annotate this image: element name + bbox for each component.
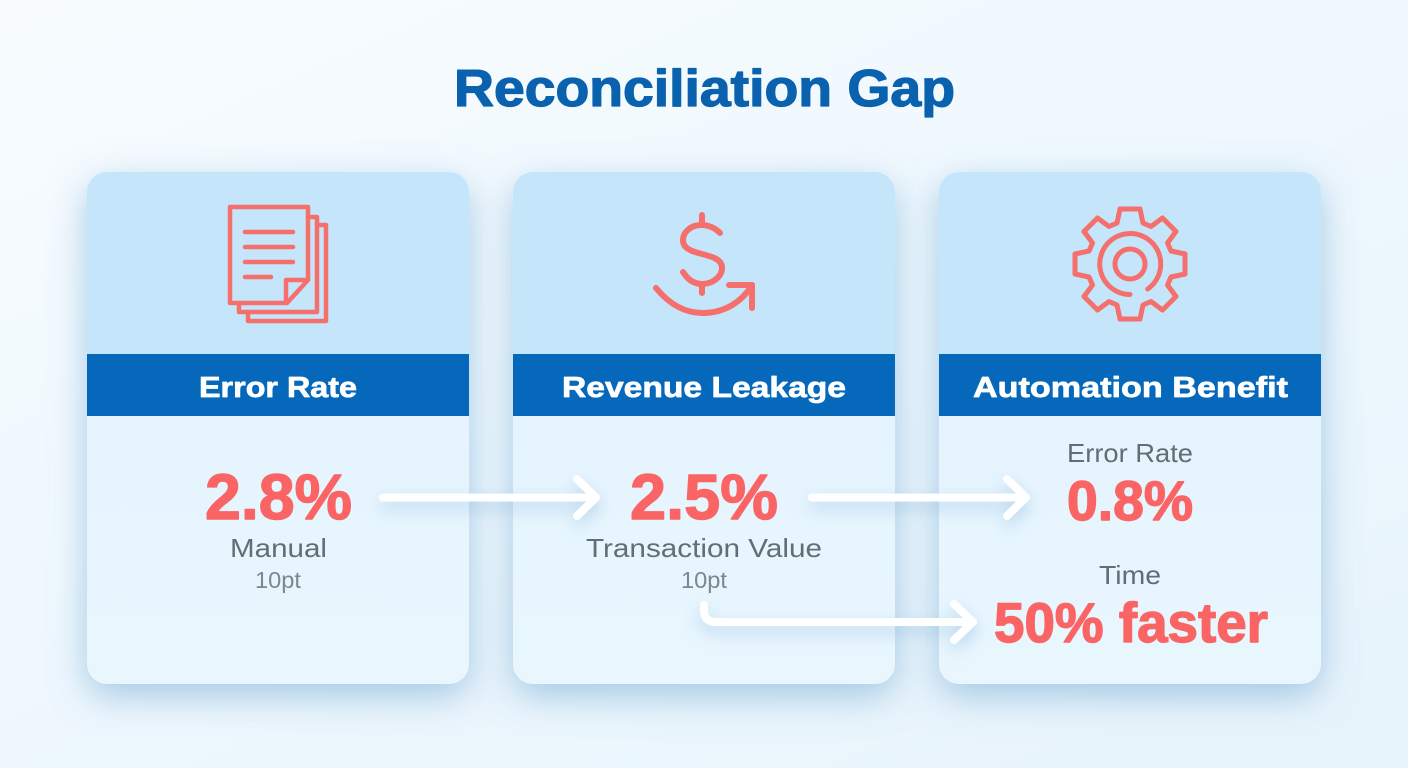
title: Reconciliation Gap bbox=[454, 60, 955, 118]
metric: automated error rate: Error Rate bbox=[1067, 438, 1193, 468]
panel: revenue leakage bbox=[513, 172, 895, 684]
arrow: error rate to revenue leakage bbox=[383, 479, 596, 516]
metric: manual error rate bbox=[205, 461, 352, 593]
icon: dollar with curved arrow bbox=[656, 215, 752, 313]
icon: gear bbox=[1075, 209, 1185, 319]
panel: automation benefit bbox=[939, 172, 1321, 684]
heading: revenue leakage: Revenue Leakage bbox=[562, 372, 846, 404]
metric: revenue leakage: Transaction Value bbox=[586, 533, 822, 563]
metric: automated error rate bbox=[1067, 438, 1193, 532]
metric: time saved: Time bbox=[1099, 560, 1161, 590]
heading: error rate: Error Rate bbox=[199, 372, 357, 404]
icon: stacked documents bbox=[230, 207, 326, 321]
metric: revenue leakage: 10pt bbox=[681, 567, 728, 593]
arrow: revenue leakage to time bbox=[704, 604, 973, 640]
metric: revenue leakage bbox=[586, 461, 822, 593]
arrow: revenue leakage to error rate bbox=[812, 479, 1026, 516]
metric: manual error rate: Manual bbox=[230, 533, 327, 563]
metric: automated error rate: 0.8% bbox=[1067, 469, 1193, 532]
metric: time saved: 50% faster bbox=[994, 591, 1268, 654]
metric: time saved bbox=[994, 560, 1268, 654]
metric: manual error rate: 10pt bbox=[255, 567, 302, 593]
metric: manual error rate: 2.8% bbox=[205, 461, 352, 533]
heading: automation benefit: Automation Benefit bbox=[973, 372, 1288, 404]
panel: error rate bbox=[87, 172, 469, 684]
metric: revenue leakage: 2.5% bbox=[630, 461, 778, 533]
